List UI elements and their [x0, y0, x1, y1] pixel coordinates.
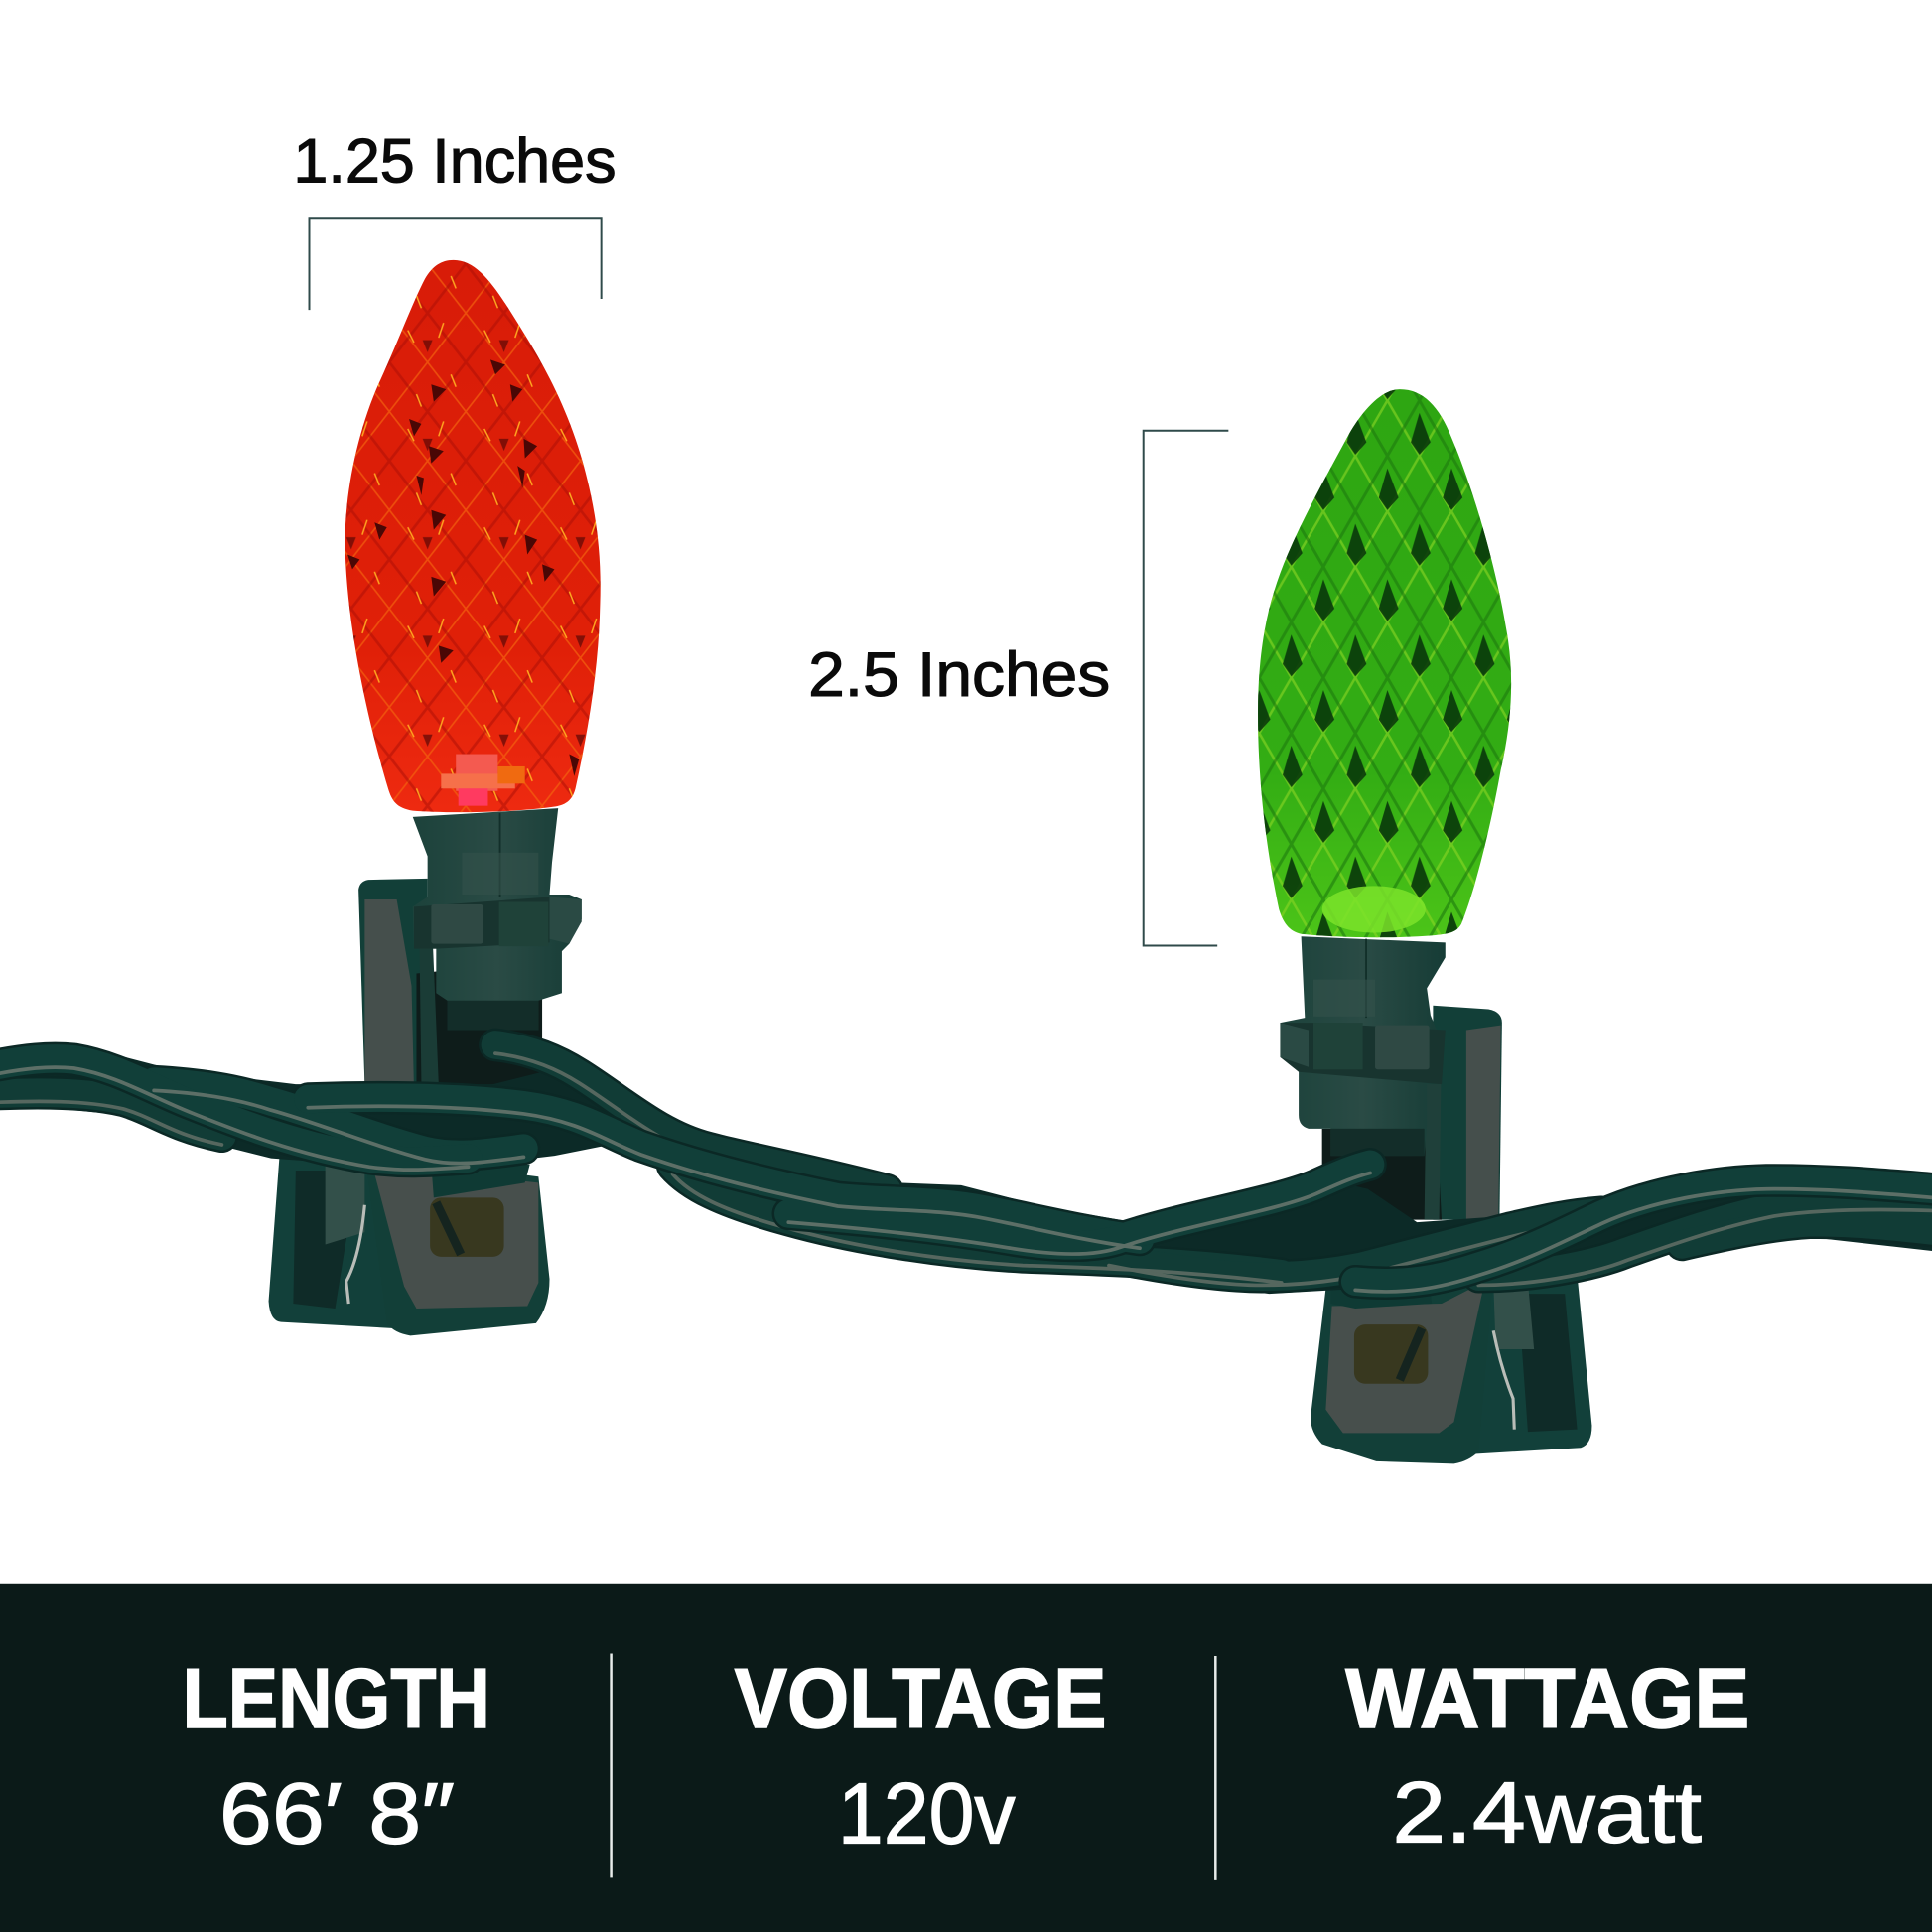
- twisted wire cable: [0, 1044, 1932, 1294]
- spec: length: [183, 1651, 490, 1863]
- cable underlay: [0, 1044, 1932, 1294]
- wire strand body: lower layer: [0, 1044, 1932, 1277]
- height dimension label: 2.5 Inches: [808, 640, 1110, 710]
- specification band: [0, 1584, 1932, 1932]
- wire strand outlines: upper layer: [0, 1058, 1932, 1283]
- right clip: back and front arms, behind the wire: [1311, 1006, 1591, 1463]
- divider: [610, 1654, 613, 1877]
- spec: length: LENGTH: [183, 1651, 490, 1746]
- spec: voltage: 120v: [838, 1766, 1016, 1863]
- wire highlight: lower layer: [0, 1053, 1932, 1285]
- wire highlight: upper layer: [0, 1067, 1932, 1292]
- right socket: [1280, 936, 1446, 1156]
- red bulb: [345, 260, 601, 812]
- wire strand outlines: lower layer: [0, 1044, 1932, 1277]
- left socket: [413, 808, 582, 1031]
- divider: [1214, 1656, 1217, 1880]
- green bulb: [1258, 389, 1511, 937]
- spec: wattage: [1345, 1651, 1749, 1861]
- width dimension bracket: [310, 218, 602, 310]
- left clip: back and front arms, behind the wire: [269, 879, 550, 1335]
- spec: wattage: WATTAGE: [1345, 1651, 1749, 1746]
- spec: voltage: VOLTAGE: [735, 1651, 1106, 1746]
- wire strand body: upper layer: [0, 1058, 1932, 1283]
- spec: voltage: [735, 1651, 1106, 1863]
- red bulb dark facets: [347, 359, 579, 776]
- width dimension label: 1.25 Inches: [293, 127, 617, 197]
- height dimension bracket: [1144, 431, 1228, 946]
- spec: length: 66′ 8″: [219, 1766, 455, 1863]
- spec: wattage: 2.4watt: [1392, 1764, 1702, 1861]
